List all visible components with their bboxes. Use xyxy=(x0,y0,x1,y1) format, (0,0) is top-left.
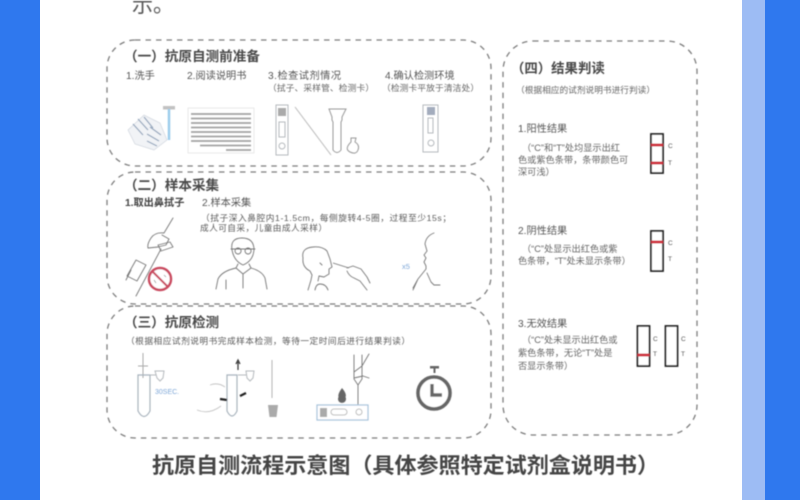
panel 2 heading: （二）样本采集 xyxy=(124,177,220,193)
negative result: 色条带，“T”处未显示条带） xyxy=(518,255,631,266)
test strip: invalid blank: C xyxy=(681,336,686,343)
step labels: （拭子、采样管、检测卡） xyxy=(268,82,374,93)
invalid result: 紫色条带，无论“T”处是 xyxy=(518,347,612,358)
test strip: negative: T xyxy=(668,256,672,263)
test strip: positive xyxy=(651,134,673,173)
test strip: invalid with T line xyxy=(638,326,658,366)
step labels: 3.检查试剂情况 xyxy=(268,69,341,82)
test strip: invalid with T line: C xyxy=(653,336,658,343)
negative result: （“C”处显示出红色或紫 xyxy=(522,243,617,254)
icon: instruction sheet xyxy=(188,108,254,153)
icon: test card, swab, tube xyxy=(276,105,359,155)
panel 3 note: （根据相应试剂说明书完成样本检测，等待一定时间后进行结果判读） xyxy=(126,335,410,346)
icon: swab and cap xyxy=(268,360,278,417)
step labels: 1.取出鼻拭子 xyxy=(125,196,184,209)
panel 1 heading: （一）抗原自测前准备 xyxy=(124,48,260,64)
icon: squeezing tube xyxy=(197,360,254,416)
icon: person front view xyxy=(216,238,267,289)
negative result xyxy=(518,224,673,271)
step labels: （检测卡平放于清洁处） xyxy=(382,82,479,93)
step labels: 1.洗手 xyxy=(126,69,155,82)
invalid result: （“C”处未显示出红色或 xyxy=(522,334,617,345)
step labels: 2.样本采集 xyxy=(202,196,251,209)
caption: 抗原自测流程示意图（具体参照特定试剂盒说明书） xyxy=(152,453,659,478)
positive result: 深可浅） xyxy=(518,166,555,177)
positive result: 1.阳性结果 xyxy=(518,122,567,135)
positive result: 色或紫色条带，条带颜色可 xyxy=(518,154,628,165)
step labels xyxy=(126,69,479,93)
test strip: negative: C xyxy=(668,240,673,247)
icon: adding drops to test card xyxy=(317,354,369,420)
panel 4: result reading xyxy=(503,41,697,435)
invalid result: 否显示条带） xyxy=(518,360,573,371)
test strip: invalid with T line: T xyxy=(653,351,657,358)
step labels: （拭子深入鼻腔内1-1.5cm，每侧旋转4-5圈，过程至少15s； xyxy=(201,212,451,223)
panel 3 heading: （三）抗原检测 xyxy=(124,314,219,330)
step labels: 2.阅读说明书 xyxy=(187,69,246,82)
positive result xyxy=(518,122,673,177)
test strip: positive: T xyxy=(668,160,672,167)
icon: head side profile xyxy=(413,233,440,290)
positive result: （“C”和“T”处均显示出红 xyxy=(522,142,620,153)
panel 1: preparation xyxy=(107,40,491,166)
step labels: 4.确认检测环境 xyxy=(385,69,455,82)
icon: tube with swab, 30 sec: 30SEC. xyxy=(155,389,179,396)
step labels: 成人可自采，儿童由成人采样） xyxy=(200,222,327,233)
icon: swabbing nostril xyxy=(303,247,370,290)
test strip: positive: C xyxy=(668,143,673,150)
panel 4 note: （根据相应的试剂说明书进行判读） xyxy=(516,84,655,95)
icon: taking swab out of package xyxy=(126,218,173,296)
invalid result: 3.无效结果 xyxy=(518,317,567,330)
test strip: invalid blank xyxy=(666,326,686,366)
icon: tube with swab, 30 sec xyxy=(138,353,179,416)
panel 4 heading: （四）结果判读 xyxy=(511,60,605,76)
test strip: invalid blank: T xyxy=(681,351,685,358)
invalid result xyxy=(518,317,686,371)
test strip: negative xyxy=(651,231,673,271)
panel 3: antigen test xyxy=(107,306,491,438)
step labels xyxy=(125,196,451,233)
negative result: 2.阴性结果 xyxy=(518,224,567,237)
icon: test card on flat surface xyxy=(423,105,438,152)
text: rotation count: x5 xyxy=(402,262,410,271)
icon: washing hands xyxy=(128,106,175,150)
panel 2: sample collection xyxy=(107,172,491,304)
icon: stopwatch xyxy=(418,366,450,409)
